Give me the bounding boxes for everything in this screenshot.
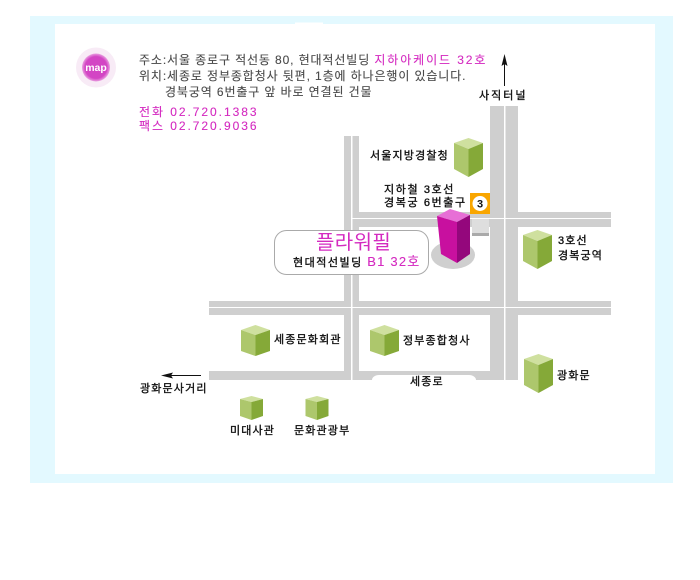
road network [209, 106, 611, 385]
building: Ministry of Culture: 문화관광부 [294, 424, 350, 437]
address text block: 위치:세종로 정부종합청사 뒷편, 1층에 하나은행이 있습니다. [139, 68, 466, 83]
building: Seoul police agency: 서울지방경찰청 [370, 149, 449, 162]
label: subway line 3 exit [384, 182, 467, 209]
contact numbers [139, 105, 258, 133]
contact numbers: 전화 02.720.1383 [139, 105, 258, 119]
label: Sajik tunnel: 사직터널 [479, 89, 527, 102]
building: Government complex [370, 325, 471, 356]
panel: background frame [30, 16, 673, 483]
building: US embassy [230, 396, 275, 437]
building: Ministry of Culture [294, 396, 350, 437]
address text block: 주소:서울 종로구 적선동 80, 현대적선빌딩 지하아케이드 32호 [139, 53, 487, 67]
icon: map badge [76, 48, 116, 88]
icon: exit 3 badge: 3 [477, 198, 483, 210]
building: Flower Feel highlighted [431, 209, 475, 269]
callout: Flower Feel location: 현대적선빌딩 B1 32호 [293, 254, 420, 269]
label: Gwanghwamun intersection: 광화문사거리 [140, 382, 208, 395]
callout: Flower Feel location: 플라워필 [316, 231, 391, 254]
building: line 3 Gyeongbokgung station: 3호선 [558, 234, 588, 247]
icon: exit 3 badge [470, 193, 490, 214]
building: line 3 Gyeongbokgung station [523, 230, 603, 269]
callout: Flower Feel location [274, 230, 428, 274]
building: Sejong Center: 세종문화회관 [274, 333, 342, 346]
address text block: 경북궁역 6번출구 앞 바로 연결된 건물 [165, 85, 372, 99]
icon: map badge: map [85, 62, 107, 74]
label: subway line 3 exit: 지하철 3호선 [384, 182, 455, 196]
building: Government complex: 정부종합청사 [403, 334, 471, 347]
building: Gwanghwamun [524, 354, 591, 393]
building: Seoul police agency [370, 138, 483, 177]
label: Sejong-ro: 세종로 [410, 375, 444, 388]
exit passage [472, 219, 489, 236]
building: US embassy: 미대사관 [230, 424, 275, 437]
building: line 3 Gyeongbokgung station: 경복궁역 [558, 249, 603, 262]
arrow: west to Gwanghwamun intersection [161, 372, 201, 378]
building: Gwanghwamun: 광화문 [557, 369, 591, 382]
label: subway line 3 exit: 경복궁 6번출구 [384, 196, 467, 209]
arrow: north to Sajik tunnel [502, 54, 508, 86]
contact numbers: 팩스 02.720.9036 [139, 119, 258, 133]
address text block [139, 53, 487, 99]
building: Sejong Center [241, 325, 342, 356]
